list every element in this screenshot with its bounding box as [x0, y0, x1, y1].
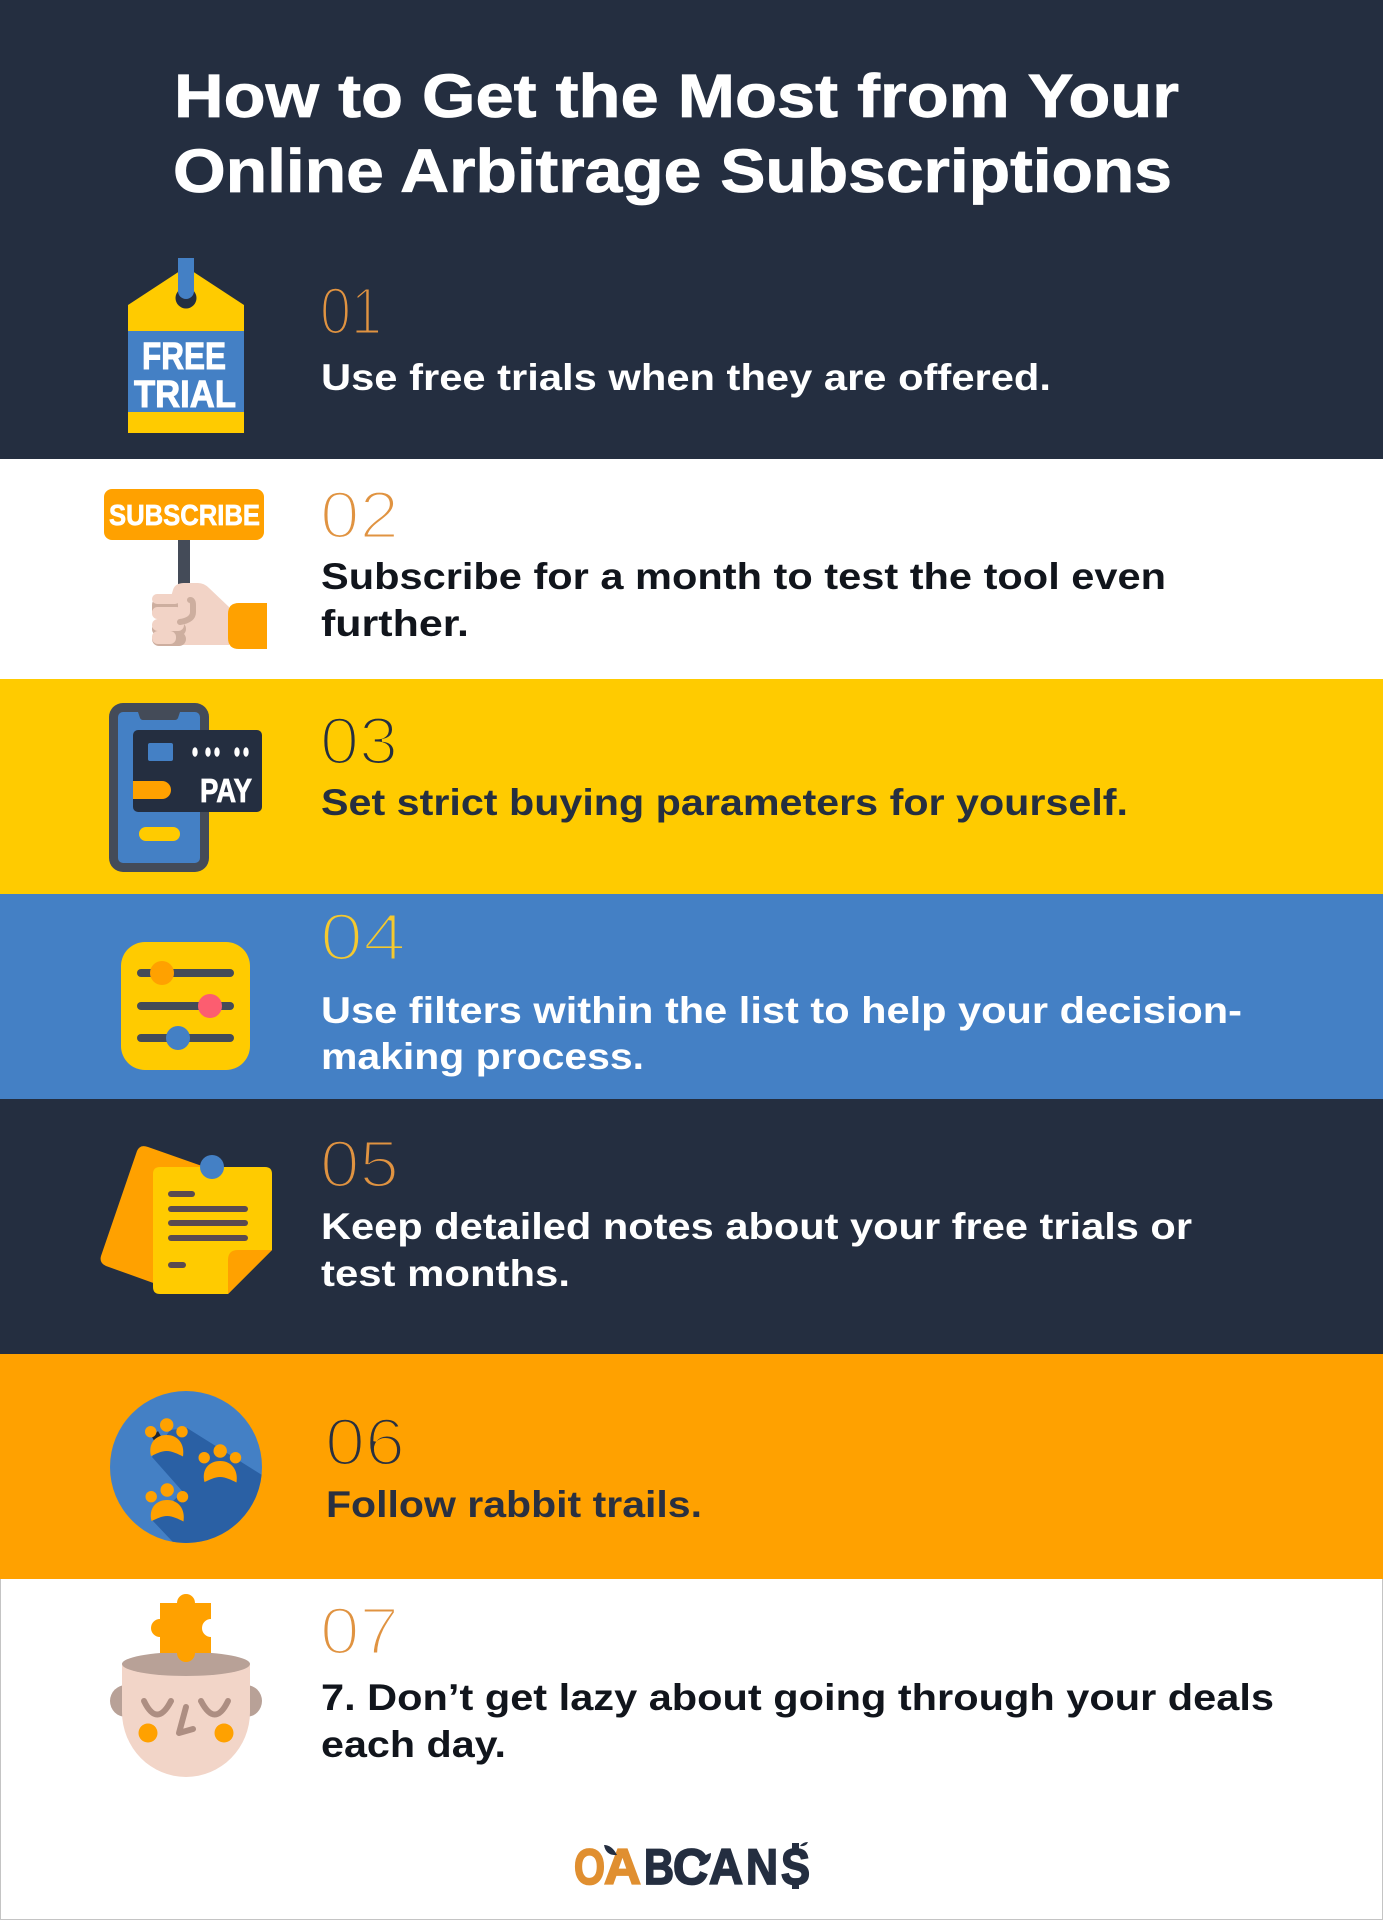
icon: free trial tag: TRIAL: [134, 374, 236, 416]
number 07: 07: [320, 1594, 399, 1669]
step 05 text: Keep detailed notes about your free trials or: [321, 1206, 1192, 1247]
logo: OA Beans: S: [781, 1839, 810, 1895]
step 04 text: Use filters within the list to help your decision-: [321, 990, 1242, 1031]
step 01 text: Use free trials when they are offered.: [321, 357, 1051, 398]
step 05 text: test months.: [321, 1253, 570, 1294]
logo: OA Beans: A: [709, 1839, 743, 1895]
number 01: 01: [320, 274, 382, 349]
logo: OA Beans: O: [574, 1839, 605, 1895]
icon: sticky notes: [101, 1146, 272, 1294]
number 03: 03: [320, 704, 398, 779]
step 02 text: [321, 556, 1166, 644]
icon: free trial tag: [128, 258, 244, 433]
icon: subscribe sign and hand: [104, 489, 267, 649]
panel: step 06: [0, 1354, 1383, 1579]
icon: free trial tag: FREE: [142, 336, 226, 378]
logo: OA Beans: N: [746, 1839, 778, 1895]
panel: header: [0, 0, 1383, 240]
step 05 text: [321, 1206, 1192, 1294]
step 07 text: [321, 1677, 1274, 1765]
panel: step 01: [0, 240, 1383, 459]
number 02: 02: [320, 478, 399, 553]
icon: sliders: [121, 942, 250, 1070]
panel: step 02: [0, 459, 1383, 679]
panel: step 05: [0, 1099, 1383, 1354]
logo: OA Beans: A: [604, 1839, 641, 1895]
number 04: 04: [320, 900, 406, 975]
panel: step 03: [0, 679, 1383, 894]
icon: paw prints: [110, 1391, 262, 1543]
step 07 text: 7. Don’t get lazy about going through your deals: [321, 1677, 1274, 1718]
logo: OA Beans: B: [644, 1839, 674, 1895]
logo: OA Beans: [574, 1839, 810, 1895]
step 03 text: Set strict buying parameters for yourself.: [321, 782, 1128, 823]
step 02 text: further.: [321, 603, 469, 644]
step 04 text: making process.: [321, 1036, 644, 1077]
step 02 text: Subscribe for a month to test the tool even: [321, 556, 1166, 597]
logo: OA Beans: C: [673, 1839, 708, 1895]
number 05: 05: [320, 1127, 399, 1202]
step 07 text: each day.: [321, 1724, 506, 1765]
icon: subscribe sign and hand: SUBSCRIBE: [109, 500, 260, 532]
icon: phone and pay card: PAY: [200, 772, 252, 809]
title: [173, 62, 1179, 205]
panel: step 04: [0, 894, 1383, 1099]
icon: head with puzzle piece: [110, 1594, 262, 1777]
number 06: 06: [325, 1405, 405, 1480]
title: Online Arbitrage Subscriptions: [173, 137, 1172, 205]
title: How to Get the Most from Your: [174, 62, 1179, 130]
step 06 text: Follow rabbit trails.: [326, 1484, 702, 1525]
panel: step 07: [0, 1579, 1383, 1920]
icon: phone and pay card: [109, 703, 262, 872]
step 04 text: [321, 990, 1242, 1077]
